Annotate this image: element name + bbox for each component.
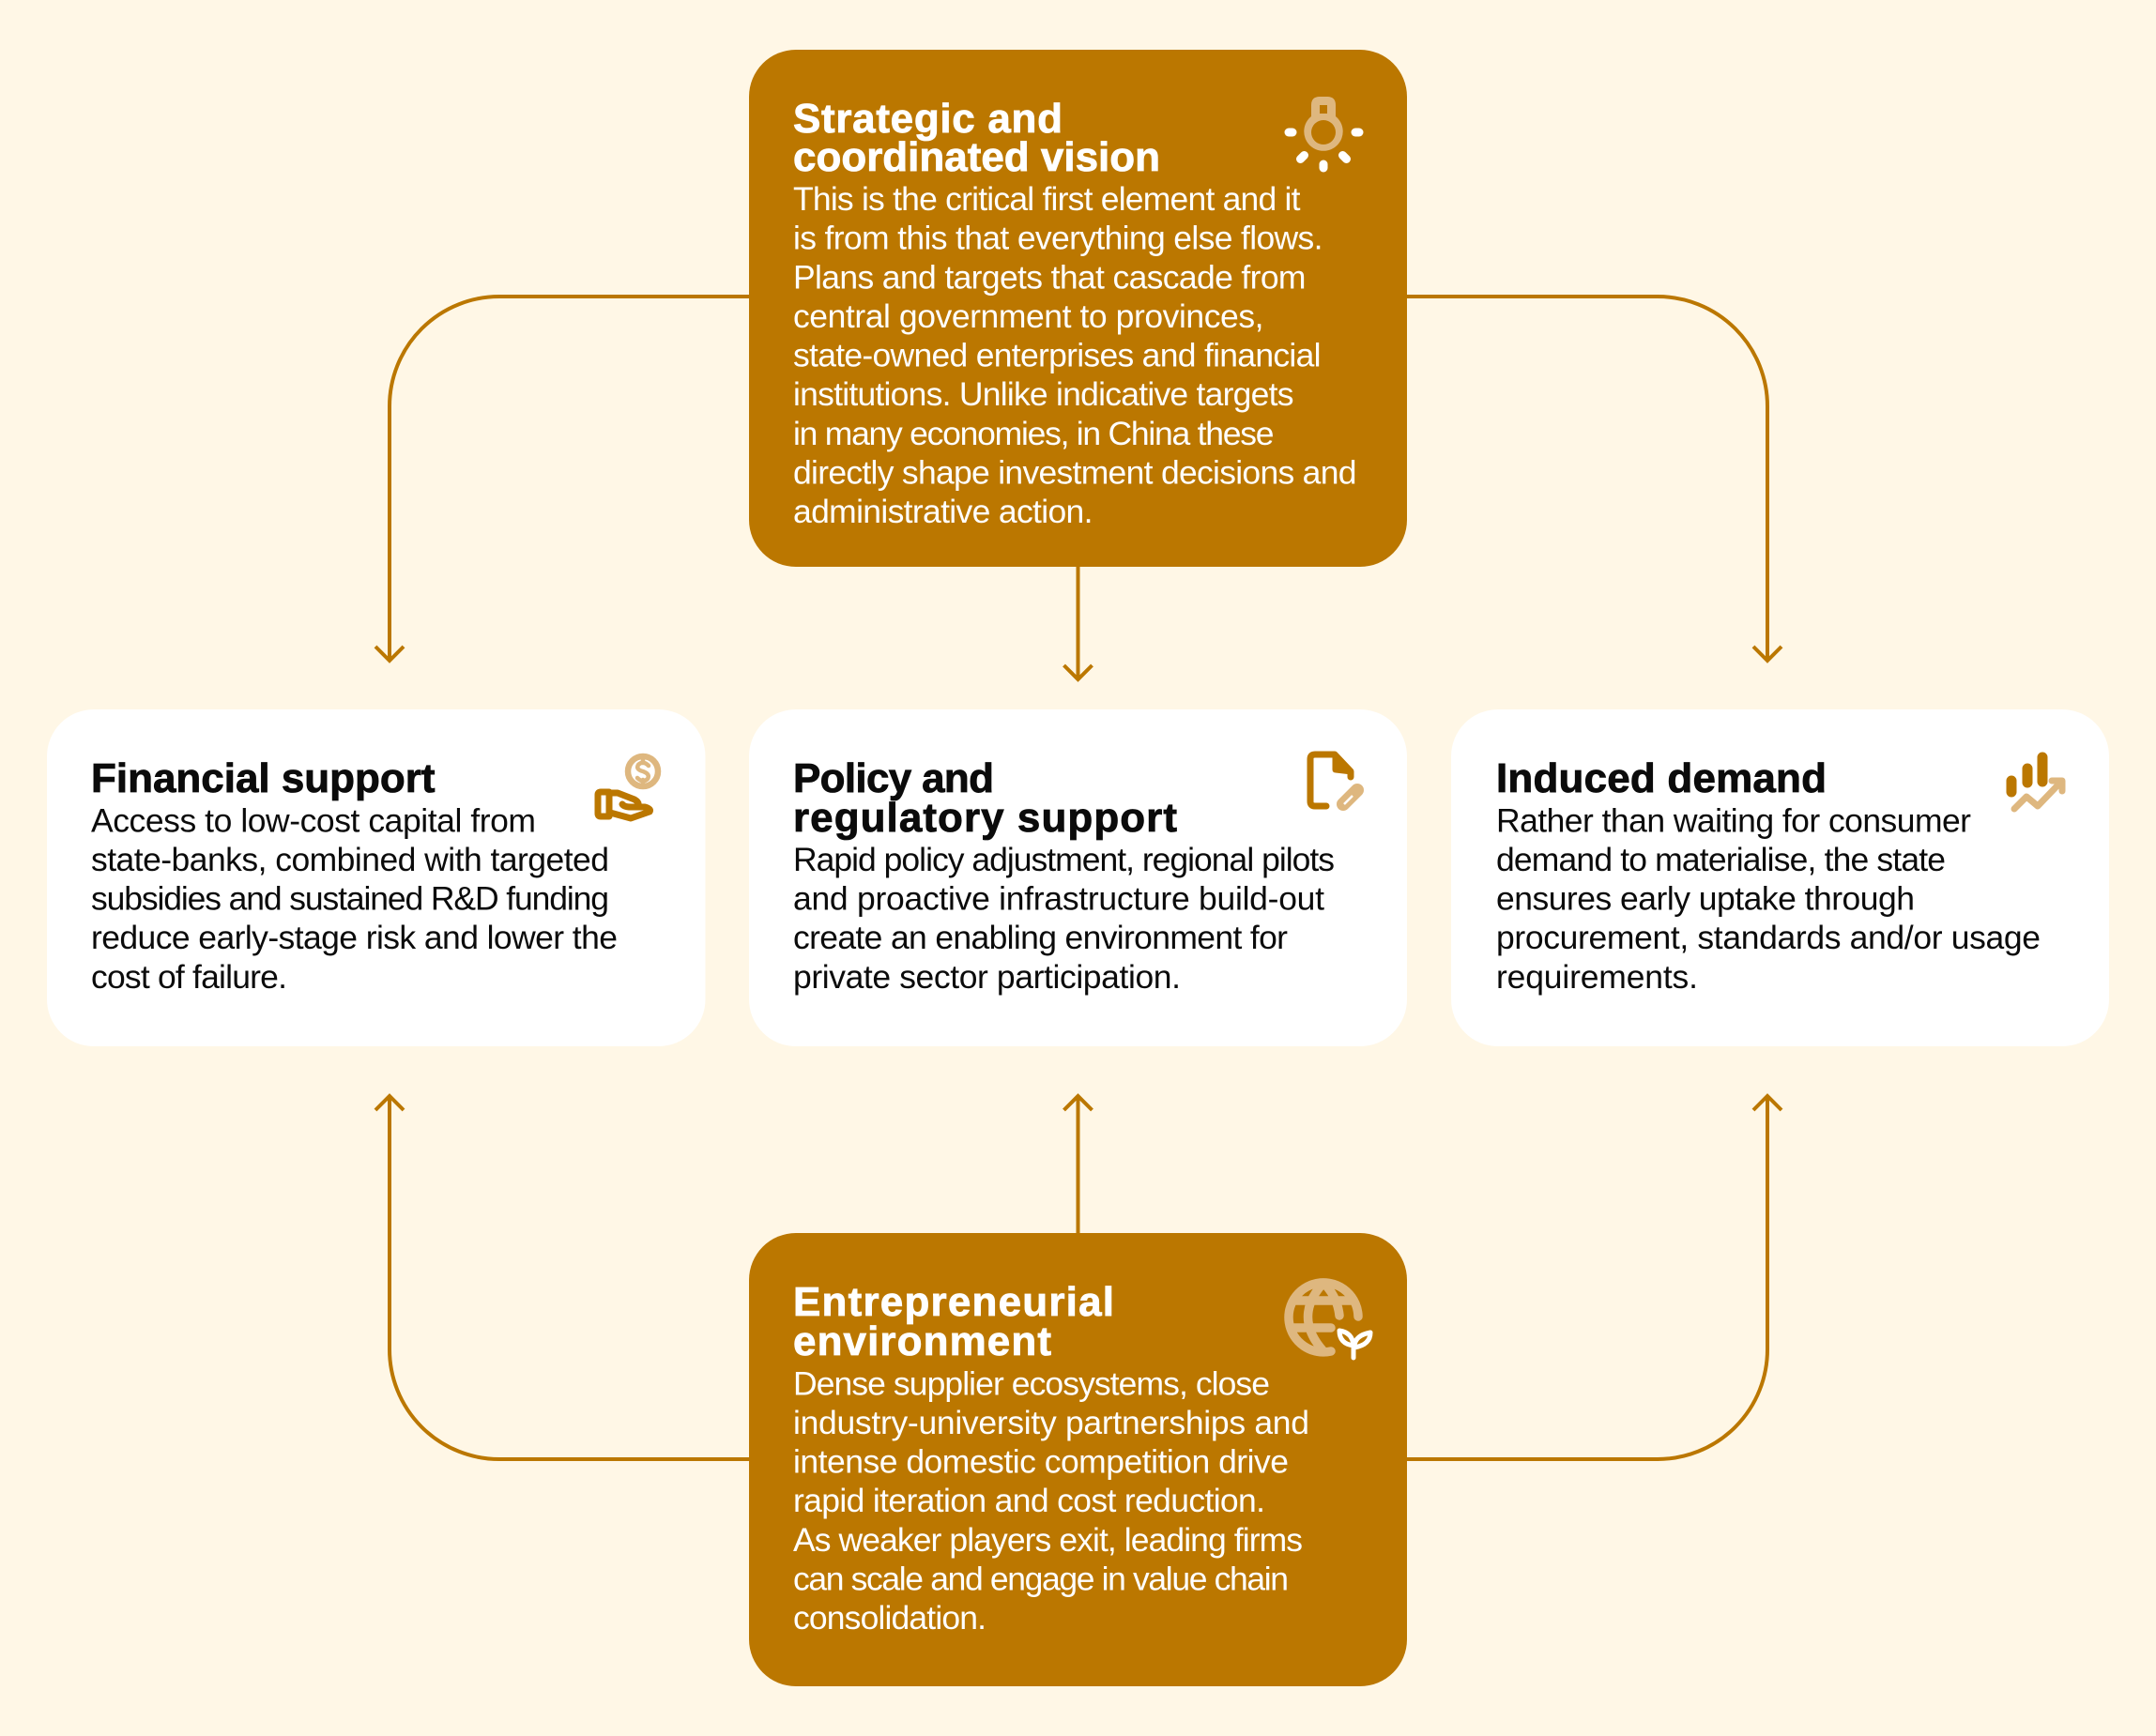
arrow: vision to financial support: [375, 297, 749, 661]
heading: induced demand: Induced demand: [1496, 755, 1827, 801]
icon: light bulb: [1289, 97, 1359, 168]
text: entrepreneurial environment description: industry-university partnerships and: [793, 1404, 1309, 1441]
text: induced demand description: requirements.: [1496, 958, 1698, 996]
text: policy description: [793, 841, 1335, 996]
heading: entrepreneurial environment: Entrepreneurial: [793, 1279, 1114, 1325]
text: vision description: directly shape investment decisions and: [793, 453, 1357, 491]
text: vision description: This is the critical first element and it: [793, 180, 1301, 218]
text: vision description: is from this that everything else flows.: [793, 220, 1323, 257]
text: entrepreneurial environment description: can scale and engage in value chain: [793, 1560, 1289, 1597]
icon: globe with sprout: [1289, 1283, 1370, 1358]
heading: policy and regulatory support: regulatory support: [793, 795, 1177, 841]
text: vision description: [793, 180, 1357, 530]
text: entrepreneurial environment description: rapid iteration and cost reduction.: [793, 1482, 1265, 1519]
arrow: entrepreneurial environment to induced demand: [1407, 1096, 1781, 1459]
panel: strategic and coordinated vision: [749, 50, 1407, 567]
arrow: entrepreneurial environment to policy support: [1064, 1096, 1093, 1233]
panel: financial support: [47, 709, 706, 1046]
panel: entrepreneurial environment: [749, 1233, 1407, 1686]
heading: policy and regulatory support: Policy and: [793, 755, 994, 801]
panel: policy and regulatory support: [749, 709, 1407, 1046]
heading: strategic and coordinated vision: Strategic and: [793, 96, 1063, 142]
arrow: vision to policy support: [1064, 567, 1093, 679]
text: financial support description: cost of failure.: [91, 958, 287, 996]
text: vision description: central government to provinces,: [793, 297, 1263, 335]
text: policy description: and proactive infrastructure build-out: [793, 880, 1324, 918]
text: induced demand description: [1496, 801, 2041, 996]
icon: hand with coin: [598, 756, 658, 818]
text: induced demand description: ensures early uptake through: [1496, 880, 1915, 918]
icon: document with pencil: [1310, 754, 1357, 806]
text: entrepreneurial environment description: intense domestic competition drive: [793, 1443, 1289, 1481]
text: financial support description: [91, 801, 618, 996]
text: induced demand description: procurement, standards and/or usage: [1496, 919, 2041, 956]
text: financial support description: Access to low-cost capital from: [91, 801, 536, 839]
heading: policy and regulatory support: [793, 755, 1177, 841]
text: entrepreneurial environment description: consolidation.: [793, 1599, 986, 1637]
text: induced demand description: Rather than waiting for consumer: [1496, 801, 1971, 839]
heading: financial support: Financial support: [91, 755, 436, 801]
panel: induced demand: [1451, 709, 2109, 1046]
text: vision description: state-owned enterprises and financial: [793, 337, 1322, 374]
icon: bars with rising arrow: [2011, 757, 2062, 809]
text: policy description: Rapid policy adjustment, regional pilots: [793, 841, 1335, 878]
heading: strategic and coordinated vision: [793, 96, 1160, 180]
text: vision description: administrative action.: [793, 493, 1093, 530]
text: entrepreneurial environment description: [793, 1364, 1309, 1637]
text: induced demand description: demand to materialise, the state: [1496, 841, 1946, 878]
text: financial support description: state-banks, combined with targeted: [91, 841, 609, 878]
heading: strategic and coordinated vision: coordinated vision: [793, 134, 1160, 180]
heading: entrepreneurial environment: [793, 1279, 1114, 1364]
arrow: vision to induced demand: [1407, 297, 1781, 661]
text: financial support description: reduce early-stage risk and lower the: [91, 919, 618, 956]
text: vision description: institutions. Unlike indicative targets: [793, 375, 1293, 413]
arrow: entrepreneurial environment to financial support: [375, 1096, 749, 1459]
text: entrepreneurial environment description: As weaker players exit, leading firms: [793, 1521, 1303, 1559]
text: entrepreneurial environment description: Dense supplier ecosystems, close: [793, 1364, 1270, 1402]
heading: entrepreneurial environment: environment: [793, 1318, 1051, 1364]
text: financial support description: subsidies and sustained R&D funding: [91, 880, 609, 918]
text: policy description: create an enabling environment for: [793, 919, 1288, 956]
text: vision description: Plans and targets that cascade from: [793, 258, 1307, 296]
text: vision description: in many economies, in China these: [793, 415, 1275, 452]
text: policy description: private sector participation.: [793, 958, 1181, 996]
